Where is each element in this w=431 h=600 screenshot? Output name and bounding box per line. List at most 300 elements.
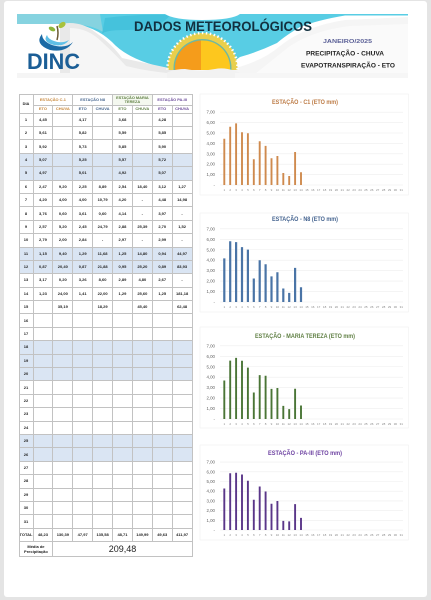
chart: estação N8: 4,00: [206, 258, 216, 263]
chart: estação PA-III: 2,00: [206, 508, 216, 513]
data table: ETO and rainfall by station: ESTAÇÃO PA-III: [157, 97, 187, 102]
chart: estação C1: 24: [358, 188, 362, 192]
chart: estação C1: 13: [293, 188, 297, 192]
chart: estação N8: 9: [271, 305, 273, 309]
chart: estação PA-III: 4: [241, 533, 243, 537]
subtitle lines: [301, 39, 395, 70]
data table: ETO and rainfall by station: 9: [25, 224, 27, 229]
data table: ETO and rainfall by station: [18, 94, 193, 557]
data table: ETO and rainfall by station: 2,67: [158, 277, 166, 282]
data table: ETO and rainfall by station: 25,60: [137, 291, 147, 296]
data table: ETO and rainfall by station: 4,00: [59, 197, 67, 202]
chart: estação C1: [200, 94, 408, 195]
chart: estação Maria Tereza: 13: [293, 422, 297, 426]
data table: ETO and rainfall by station: 4,80: [138, 277, 146, 282]
data table: ETO and rainfall by station: 2,79: [39, 237, 47, 242]
chart: estação Maria Tereza: 26: [370, 422, 374, 426]
data table: ETO and rainfall by station: 2,25: [79, 184, 87, 189]
data table: ETO and rainfall by station: 2,00: [59, 237, 67, 242]
chart: estação Maria Tereza: ESTAÇÃO - MARIA TEREZA (ETO mm): [255, 331, 355, 340]
data table: ETO and rainfall by station: 49,63: [157, 532, 167, 537]
chart: estação N8: 2,00: [206, 279, 216, 284]
data table: ETO and rainfall by station: 1,25: [119, 251, 126, 256]
chart: estação Maria Tereza: 16: [311, 422, 315, 426]
data table: ETO and rainfall by station: 12: [24, 264, 28, 269]
chart: estação Maria Tereza: 11: [282, 422, 285, 426]
data table: ETO and rainfall by station: -: [142, 197, 143, 202]
chart: estação PA-III: 9: [271, 533, 273, 537]
data table: ETO and rainfall by station: ETO: [39, 106, 47, 111]
data table: ETO and rainfall by station: ESTAÇÃO MARIA TEREZA: [116, 95, 149, 104]
chart: estação N8: 18: [323, 305, 327, 309]
chart: estação C1: 6: [253, 188, 255, 192]
chart: estação Maria Tereza: 1: [223, 422, 225, 426]
chart: estação PA-III: 15: [305, 533, 309, 537]
data table: ETO and rainfall by station: 25,39: [137, 224, 147, 229]
data table: ETO and rainfall by station: 2,45: [79, 224, 87, 229]
chart: estação N8: -: [214, 300, 216, 304]
data table: ETO and rainfall by station: 5,20: [59, 224, 67, 229]
data table: ETO and rainfall by station: 0,20: [59, 277, 67, 282]
chart: estação PA-III: 17: [317, 533, 321, 537]
chart: estação PA-III: 19: [329, 533, 332, 537]
data table: ETO and rainfall by station: 20,40: [58, 264, 68, 269]
sun: [166, 32, 238, 70]
chart: estação N8: 26: [370, 305, 374, 309]
chart: estação PA-III: 5,00: [206, 479, 216, 484]
data table: ETO and rainfall by station: 45,40: [137, 304, 147, 309]
data table: ETO and rainfall by station: 5: [25, 170, 27, 175]
chart: estação PA-III: 31: [400, 533, 403, 537]
data table: ETO and rainfall by station: 4,92: [119, 170, 126, 175]
data table: ETO and rainfall by station: 4,20: [119, 197, 126, 202]
chart: estação C1: 7: [259, 188, 261, 192]
chart: estação Maria Tereza: 18: [323, 422, 327, 426]
data table: ETO and rainfall by station: Média de: [27, 544, 44, 548]
data table: ETO and rainfall by station: 0,95: [119, 264, 126, 269]
chart: estação C1: 17: [317, 188, 321, 192]
data table: ETO and rainfall by station: 48,71: [117, 532, 127, 537]
data table: ETO and rainfall by station: 22: [24, 398, 28, 403]
chart: estação Maria Tereza: 1,00: [206, 406, 216, 411]
logo: [27, 21, 80, 74]
data table: ETO and rainfall by station: 4,14: [119, 211, 126, 216]
chart: estação N8: 1: [223, 305, 225, 309]
data table: ETO and rainfall by station: 44,97: [177, 251, 187, 256]
chart: estação C1: 31: [400, 188, 403, 192]
data table: ETO and rainfall by station: 30: [24, 505, 28, 510]
data table: ETO and rainfall by station: 35,19: [58, 304, 68, 309]
chart: estação PA-III: 26: [370, 533, 374, 537]
chart: estação N8: 4: [241, 305, 243, 309]
data table: ETO and rainfall by station: 1,15: [39, 251, 47, 256]
data table: ETO and rainfall by station: 3,26: [79, 277, 87, 282]
chart: estação N8: 7: [259, 305, 261, 309]
chart: estação N8: [200, 213, 408, 312]
chart: estação N8: 1,00: [206, 289, 216, 294]
chart: estação C1: 29: [388, 188, 391, 192]
chart: estação C1: 21: [341, 188, 344, 192]
chart: estação C1: 10: [276, 188, 279, 192]
chart: estação N8: 31: [400, 305, 403, 309]
chart: estação PA-III: 30: [394, 533, 397, 537]
data table: ETO and rainfall by station: 23: [24, 411, 28, 416]
chart: estação Maria Tereza: 19: [329, 422, 332, 426]
data table: ETO and rainfall by station: 181,18: [176, 291, 188, 296]
data table: ETO and rainfall by station: 4,28: [158, 117, 166, 122]
chart: estação C1: 9: [271, 188, 273, 192]
data table: ETO and rainfall by station: 130,39: [57, 532, 69, 537]
chart: estação PA-III: [200, 445, 408, 540]
data table: ETO and rainfall by station: 10: [24, 237, 28, 242]
chart: estação Maria Tereza: 7: [259, 422, 261, 426]
data table: ETO and rainfall by station: 0,87: [79, 264, 87, 269]
chart: estação Maria Tereza: 30: [394, 422, 397, 426]
data table: ETO and rainfall by station: -: [102, 237, 103, 242]
chart: estação Maria Tereza: 28: [382, 422, 386, 426]
chart: estação Maria Tereza: -: [214, 416, 216, 422]
data table: ETO and rainfall by station: -: [181, 211, 183, 216]
data table: ETO and rainfall by station: 47,97: [78, 532, 88, 537]
data table: ETO and rainfall by station: 1,29: [79, 251, 87, 256]
chart: estação PA-III: 22: [347, 533, 350, 537]
data table: ETO and rainfall by station: 2,97: [119, 237, 126, 242]
data table: ETO and rainfall by station: 5,85: [158, 130, 166, 135]
chart: estação C1: 14: [299, 188, 303, 192]
chart: estação Maria Tereza: 7,00: [206, 343, 216, 348]
chart: estação Maria Tereza: 24: [358, 422, 362, 426]
data table: ETO and rainfall by station: 25: [24, 438, 28, 443]
chart: estação Maria Tereza: 29: [388, 422, 391, 426]
data table: ETO and rainfall by station: 9,20: [59, 184, 67, 189]
chart: estação Maria Tereza: 20: [335, 422, 338, 426]
chart: estação PA-III: 13: [293, 533, 297, 537]
chart: estação C1: 5: [247, 188, 249, 192]
data table: ETO and rainfall by station: 26: [24, 452, 28, 457]
chart: estação C1: 1,00: [206, 172, 216, 177]
data table: ETO and rainfall by station: 2,84: [79, 237, 87, 242]
chart: estação PA-III: 28: [382, 533, 386, 537]
data table: ETO and rainfall by station: 2,57: [39, 224, 47, 229]
header banner: [17, 14, 408, 78]
chart: estação PA-III: 4,00: [206, 489, 216, 494]
chart: estação PA-III: 18: [323, 533, 327, 537]
data table: ETO and rainfall by station: 27: [24, 465, 28, 470]
chart: estação PA-III: 20: [335, 533, 338, 537]
chart: estação Maria Tereza: 8: [265, 422, 267, 426]
chart: estação C1: 19: [329, 188, 332, 192]
chart: estação C1: 2: [229, 188, 231, 192]
chart: estação Maria Tereza: 22: [347, 422, 350, 426]
chart: estação C1: 1: [223, 188, 225, 192]
data table: ETO and rainfall by station: 8,89: [99, 184, 106, 189]
chart: estação PA-III: 3: [235, 533, 237, 537]
data table: ETO and rainfall by station: TOTAL: [20, 532, 32, 537]
chart: estação Maria Tereza: 31: [400, 422, 403, 426]
chart: estação N8: 3: [235, 305, 237, 309]
data table: ETO and rainfall by station: 2,47: [39, 184, 47, 189]
data table: ETO and rainfall by station: 0,87: [39, 264, 47, 269]
data table: ETO and rainfall by station: 2,99: [158, 237, 166, 242]
logo: DINC: [27, 49, 80, 74]
data table: ETO and rainfall by station: 2,88: [119, 224, 126, 229]
chart: estação N8: 23: [352, 305, 356, 309]
data table: ETO and rainfall by station: 149,99: [136, 532, 148, 537]
data table: ETO and rainfall by station: 0,60: [99, 211, 106, 216]
data table: ETO and rainfall by station: 25,20: [137, 264, 147, 269]
chart: estação N8: 22: [347, 305, 350, 309]
data table: ETO and rainfall by station: 18,29: [98, 304, 108, 309]
data table: ETO and rainfall by station: 83,93: [177, 264, 187, 269]
chart: estação C1: 22: [347, 188, 350, 192]
data table: ETO and rainfall by station: 1,23: [39, 291, 47, 296]
chart: estação PA-III: 6: [253, 533, 255, 537]
subtitle lines: PRECIPITAÇÃO - CHUVA: [306, 50, 385, 58]
data table: ETO and rainfall by station: 11,68: [98, 251, 107, 256]
chart: estação PA-III: 10: [276, 533, 279, 537]
data table: ETO and rainfall by station: 5,72: [158, 157, 166, 162]
chart: estação N8: 3,00: [206, 268, 216, 273]
data table: ETO and rainfall by station: 8: [25, 211, 27, 216]
chart: estação N8: 10: [276, 305, 279, 309]
data table: ETO and rainfall by station: 1: [25, 117, 27, 122]
title: DADOS METEOROLÓGICOS: [134, 17, 312, 34]
data table: ETO and rainfall by station: 6: [25, 184, 27, 189]
data table: ETO and rainfall by station: DIA: [23, 101, 29, 106]
chart: estação Maria Tereza: 6,00: [206, 354, 216, 359]
chart: estação N8: 19: [329, 305, 332, 309]
chart: estação N8: 17: [317, 305, 321, 309]
chart: estação C1: 23: [352, 188, 356, 192]
data table: ETO and rainfall by station: 18: [24, 344, 28, 349]
data table: ETO and rainfall by station: 5,73: [79, 144, 87, 149]
chart: estação C1: 5,00: [206, 130, 216, 136]
chart: estação N8: 12: [288, 305, 291, 309]
chart: estação PA-III: 1: [223, 533, 225, 537]
chart: estação C1: 4,00: [206, 141, 216, 146]
data table: ETO and rainfall by station: 5,25: [79, 157, 87, 162]
chart: estação Maria Tereza: 2,00: [206, 396, 216, 401]
chart: estação Maria Tereza: 2: [229, 422, 231, 426]
data table: ETO and rainfall by station: 5,07: [158, 170, 166, 175]
data table: ETO and rainfall by station: 4,48: [158, 197, 166, 202]
chart: estação PA-III: 23: [352, 533, 356, 537]
data table: ETO and rainfall by station: 5,01: [79, 170, 87, 175]
data table: ETO and rainfall by station: 14: [24, 291, 28, 296]
clouds: [60, 23, 178, 78]
data table: ETO and rainfall by station: 21,88: [98, 264, 108, 269]
chart: estação Maria Tereza: 3: [235, 422, 237, 426]
chart: estação C1: 11: [282, 188, 285, 192]
chart: estação PA-III: 24: [358, 533, 362, 537]
chart: estação N8: 28: [382, 305, 386, 309]
chart: estação Maria Tereza: 15: [305, 422, 309, 426]
data table: ETO and rainfall by station: 62,48: [177, 304, 187, 309]
chart: estação Maria Tereza: 23: [352, 422, 356, 426]
chart: estação C1: -: [214, 182, 216, 188]
data table: ETO and rainfall by station: 11: [24, 251, 28, 256]
data table: ETO and rainfall by station: 8,60: [99, 277, 106, 282]
chart: estação C1: 20: [335, 188, 338, 192]
data table: ETO and rainfall by station: 2,89: [119, 277, 126, 282]
data table: ETO and rainfall by station: -: [142, 237, 143, 242]
chart: estação PA-III: 14: [299, 533, 303, 537]
data table: ETO and rainfall by station: 24: [24, 425, 28, 430]
chart: estação C1: 15: [305, 188, 309, 192]
data table: ETO and rainfall by station: -: [181, 277, 183, 282]
data table: ETO and rainfall by station: 4,45: [39, 117, 47, 122]
data table: ETO and rainfall by station: 18,40: [137, 184, 147, 189]
data table: ETO and rainfall by station: 7: [25, 197, 27, 202]
data table: ETO and rainfall by station: -: [181, 237, 183, 242]
chart: estação N8: 25: [364, 305, 368, 309]
data table: ETO and rainfall by station: 17: [24, 331, 28, 336]
chart: estação PA-III: 12: [288, 533, 291, 537]
chart: estação C1: ESTAÇÃO - C1 (ETO mm): [272, 97, 338, 106]
chart: estação Maria Tereza: 14: [299, 422, 303, 426]
chart: estação Maria Tereza: 12: [288, 422, 291, 426]
chart: estação PA-III: 11: [282, 533, 285, 537]
data table: ETO and rainfall by station: ETO: [118, 106, 127, 111]
data table: ETO and rainfall by station: 5,90: [158, 144, 166, 149]
data table: ETO and rainfall by station: 10,79: [98, 197, 108, 202]
data table: ETO and rainfall by station: 31: [24, 518, 28, 524]
chart: estação C1: 3: [235, 188, 237, 192]
chart: estação N8: 24: [358, 305, 362, 309]
data table: ETO and rainfall by station: Precipitação: [24, 549, 48, 554]
chart: estação N8: 6,00: [206, 237, 216, 242]
data table: ETO and rainfall by station: 0,60: [59, 211, 67, 216]
data table: ETO and rainfall by station: 5,07: [39, 157, 47, 162]
data table: ETO and rainfall by station: 21: [24, 385, 28, 390]
chart: estação PA-III: 7,00: [206, 460, 216, 465]
sky: [17, 14, 408, 70]
chart: estação N8: 21: [341, 305, 344, 309]
data table: ETO and rainfall by station: 4,20: [39, 197, 47, 202]
data table: ETO and rainfall by station: 20: [24, 371, 28, 376]
chart: estação C1: 7,00: [206, 110, 216, 115]
data table: ETO and rainfall by station: 0,94: [158, 251, 166, 256]
chart: estação Maria Tereza: 27: [376, 422, 380, 426]
chart: estação PA-III: 27: [376, 533, 380, 537]
chart: estação N8: 13: [293, 305, 297, 309]
data table: ETO and rainfall by station: 16: [24, 318, 28, 323]
data table: ETO and rainfall by station: 14,98: [177, 197, 187, 202]
chart: estação PA-III: 3,00: [206, 498, 216, 503]
chart: estação N8: ESTAÇÃO - N8 (ETO mm): [272, 214, 338, 223]
data table: ETO and rainfall by station: 29: [24, 492, 28, 497]
chart: estação PA-III: 21: [341, 533, 344, 537]
chart: estação N8: 5: [247, 305, 249, 309]
data table: ETO and rainfall by station: 3,12: [158, 184, 166, 189]
subtitle lines: EVAPOTRANSPIRAÇÃO - ETO: [301, 62, 395, 70]
data table: ETO and rainfall by station: CHUVA: [175, 106, 189, 111]
chart: estação Maria Tereza: 10: [276, 422, 279, 426]
chart: estação N8: 15: [305, 305, 309, 309]
chart: estação N8: 16: [311, 305, 315, 309]
chart: estação PA-III: 6,00: [206, 469, 216, 474]
data table: ETO and rainfall by station: 3,68: [119, 117, 126, 122]
chart: estação Maria Tereza: 21: [341, 422, 344, 426]
data table: ETO and rainfall by station: 2,70: [158, 224, 166, 229]
data table: ETO and rainfall by station: 24,79: [98, 224, 108, 229]
data table: ETO and rainfall by station: 3,61: [79, 211, 87, 216]
chart: estação N8: 2: [229, 305, 231, 309]
chart: estação PA-III: 2: [229, 533, 231, 537]
data table: ETO and rainfall by station: 1,41: [79, 291, 87, 296]
data table: ETO and rainfall by station: 24,00: [58, 291, 68, 296]
chart: estação C1: 8: [265, 188, 267, 192]
data table: ETO and rainfall by station: 3,17: [39, 277, 47, 282]
chart: estação Maria Tereza: [200, 327, 408, 428]
chart: estação C1: 2,00: [206, 162, 216, 167]
chart: estação N8: 6: [253, 305, 255, 309]
chart: estação Maria Tereza: 5: [247, 422, 249, 426]
chart: estação C1: 4: [241, 188, 243, 192]
data table: ETO and rainfall by station: ETO: [79, 106, 87, 111]
chart: estação C1: 30: [394, 188, 397, 192]
chart: estação PA-III: 8: [265, 533, 267, 537]
data table: ETO and rainfall by station: 5,85: [119, 144, 126, 149]
data table: ETO and rainfall by station: 19: [24, 358, 28, 363]
data table: ETO and rainfall by station: -: [142, 211, 143, 216]
data table: ETO and rainfall by station: ETO: [158, 106, 166, 111]
data table: ETO and rainfall by station: 4: [25, 157, 27, 162]
data table: ETO and rainfall by station: 1,27: [178, 184, 186, 189]
chart: estação C1: 18: [323, 188, 327, 192]
chart: estação Maria Tereza: 3,00: [206, 385, 216, 390]
chart: estação C1: 25: [364, 188, 368, 192]
chart: estação N8: 8: [265, 305, 267, 309]
data table: ETO and rainfall by station: 0,89: [158, 264, 166, 269]
data table: ETO and rainfall by station: 1,52: [178, 224, 186, 229]
chart: estação C1: 27: [376, 188, 380, 192]
chart: estação C1: 12: [288, 188, 291, 192]
chart: estação N8: 29: [388, 305, 391, 309]
chart: estação N8: 14: [299, 305, 303, 309]
data table: ETO and rainfall by station: 3: [25, 144, 27, 149]
data table: ETO and rainfall by station: 2,54: [119, 184, 126, 189]
chart: estação N8: 27: [376, 305, 380, 309]
chart: estação Maria Tereza: 6: [253, 422, 255, 426]
data table: ETO and rainfall by station: 209,48: [109, 544, 136, 554]
data table: ETO and rainfall by station: 5,82: [79, 130, 87, 135]
data table: ETO and rainfall by station: 14,80: [137, 251, 147, 256]
data table: ETO and rainfall by station: 5,92: [39, 144, 47, 149]
chart: estação PA-III: 16: [311, 533, 315, 537]
data table: ETO and rainfall by station: 135,58: [96, 532, 109, 537]
chart: estação N8: 11: [282, 305, 285, 309]
data table: ETO and rainfall by station: 5,57: [119, 157, 126, 162]
chart: estação Maria Tereza: 5,00: [206, 364, 216, 369]
chart: estação C1: 3,00: [206, 151, 216, 156]
chart: estação Maria Tereza: 9: [271, 422, 273, 426]
data table: ETO and rainfall by station: 4,97: [39, 170, 47, 175]
data table: ETO and rainfall by station: 1,25: [158, 291, 166, 296]
data table: ETO and rainfall by station: 4,17: [79, 117, 87, 122]
chart: estação C1: 6,00: [206, 120, 216, 125]
data table: ETO and rainfall by station: 22,00: [98, 291, 108, 296]
chart: estação PA-III: 7: [259, 533, 261, 537]
chart: estação PA-III: 25: [364, 533, 368, 537]
data table: ETO and rainfall by station: 5,61: [39, 130, 47, 135]
chart: estação N8: 7,00: [206, 226, 216, 231]
chart: estação N8: 20: [335, 305, 338, 309]
chart: estação C1: 26: [370, 188, 374, 192]
chart: estação PA-III: 29: [388, 533, 391, 537]
chart: estação Maria Tereza: 4,00: [206, 375, 216, 380]
data table: ETO and rainfall by station: 9,40: [59, 251, 67, 256]
